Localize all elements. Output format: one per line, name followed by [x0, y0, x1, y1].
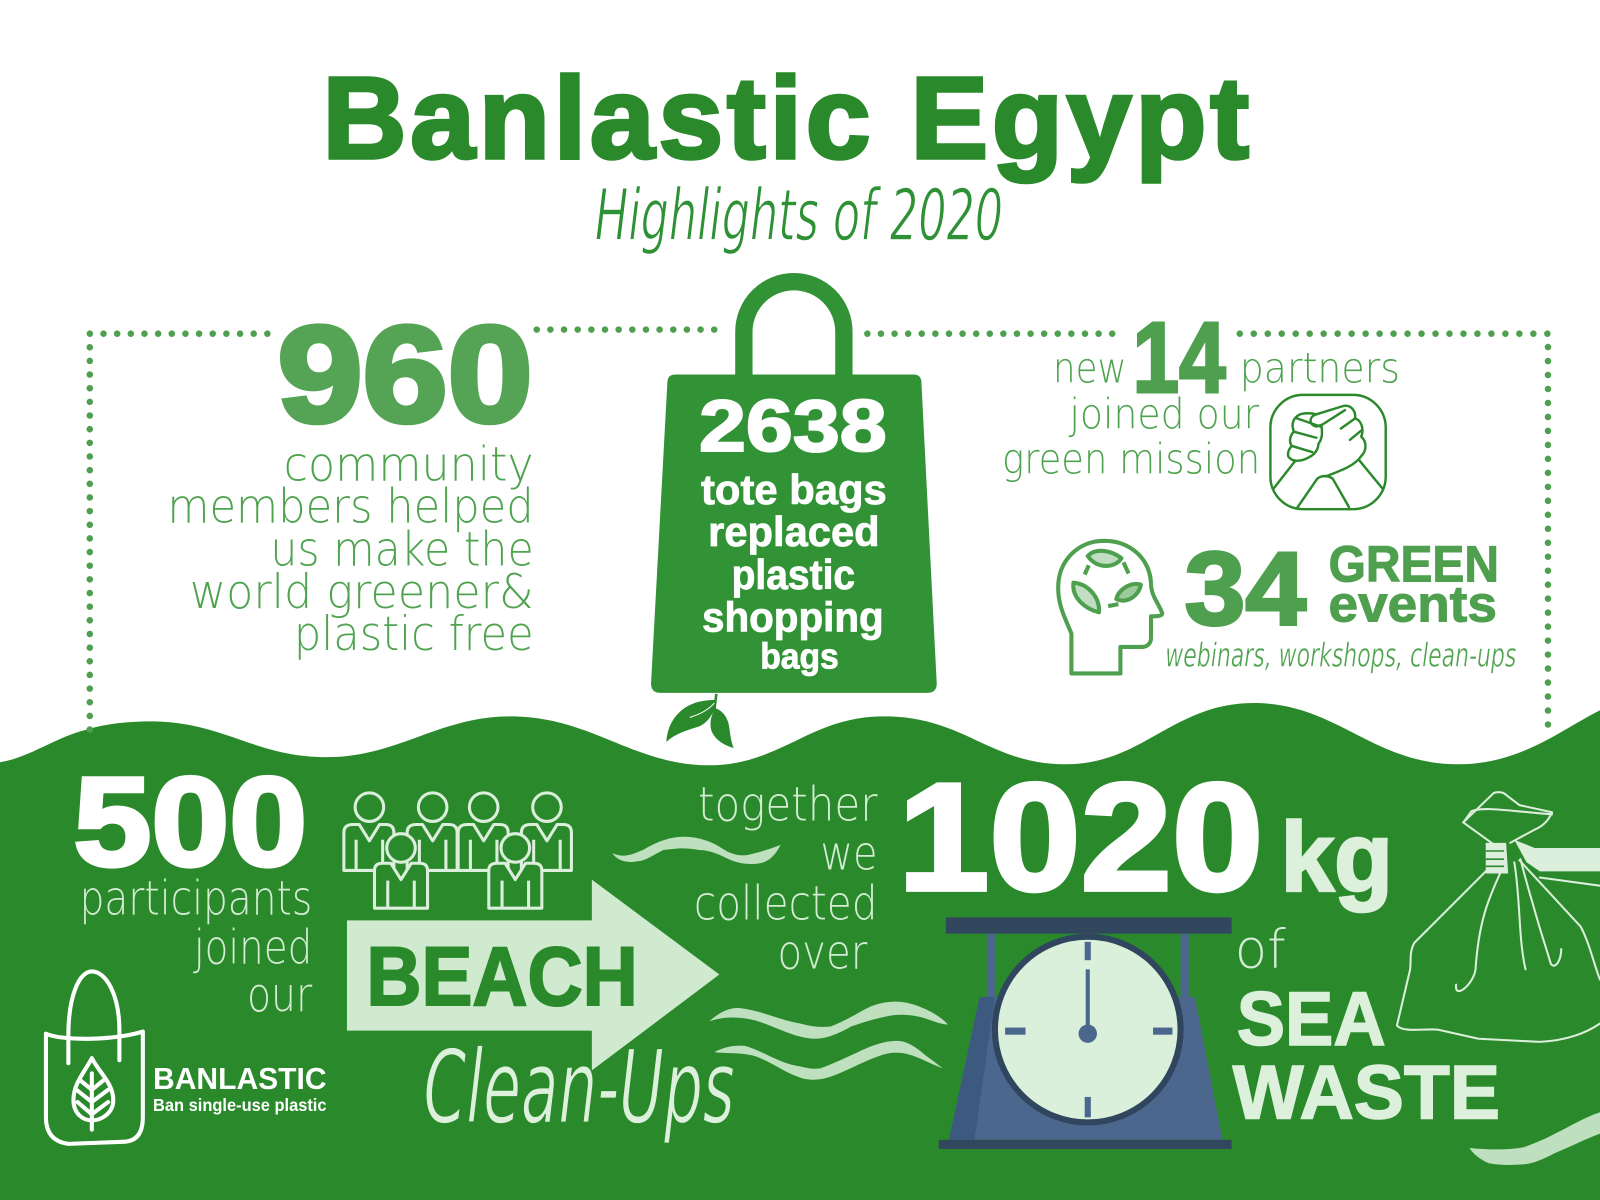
community members text: community [284, 438, 534, 493]
logo wordmark: BANLASTIC [153, 1062, 327, 1096]
icon: handshake [1270, 395, 1386, 509]
logo tagline: Ban single-use plastic [153, 1095, 327, 1115]
subtitle: Highlights of 2020 [595, 174, 1003, 257]
community members text: us make the [270, 522, 534, 577]
icon: trash bag held by hand [1397, 792, 1600, 1042]
stat: 1020 kg [898, 752, 1393, 923]
tote bag text: replaced [708, 508, 880, 555]
tote bag text [701, 466, 887, 676]
partners text: new [1053, 344, 1127, 393]
icon: leaves under bag [666, 694, 734, 748]
community members text [167, 438, 534, 662]
dotted frame [90, 330, 1548, 737]
tote bag text: plastic [732, 551, 855, 598]
stat: 34 green events: 34 [1185, 531, 1306, 647]
together we collected over: we [820, 826, 878, 881]
stat: 500 participants: 500 [73, 750, 307, 892]
stat: 34 green events [1165, 531, 1516, 674]
green wave background [0, 703, 1600, 1200]
together we collected over: collected [694, 876, 878, 931]
stat: 500 participants [73, 750, 313, 1023]
stat: 1020 kg: 1020 [898, 752, 1263, 923]
icon: weighing scale [939, 917, 1232, 1149]
sea waste heading: SEA [1237, 977, 1386, 1062]
of sea waste [1233, 918, 1500, 1135]
partners text: green mission [1002, 434, 1260, 483]
partners text: joined our [1068, 390, 1260, 439]
icon: head with leaves [1058, 541, 1162, 673]
community members text: members helped [167, 479, 534, 534]
community members text: plastic free [294, 607, 534, 662]
kg unit: kg [1281, 802, 1393, 912]
partners text: partners [1240, 344, 1400, 393]
green events heading: GREEN [1329, 536, 1499, 593]
sea waste heading: WASTE [1233, 1050, 1500, 1135]
title: Banlastic Egypt [322, 53, 1249, 183]
stat: 14 partners [1002, 302, 1400, 483]
arrow: beach [347, 880, 719, 1070]
stat: 14 partners: 14 [1133, 302, 1226, 414]
logo: banlastic [46, 971, 327, 1144]
participants text [80, 871, 313, 1023]
participants text: our [247, 968, 313, 1023]
BEACH label: BEACH [366, 929, 638, 1023]
decorative waves [612, 837, 1600, 1165]
clean-ups script: Clean-Ups [423, 1028, 735, 1147]
participants text: joined [193, 920, 312, 975]
icon: group of people [344, 793, 571, 908]
partners text [1002, 344, 1400, 483]
tote bag text: tote bags [701, 466, 887, 513]
of sea waste: of [1235, 918, 1286, 980]
sea waste heading [1233, 977, 1500, 1135]
green events heading [1329, 536, 1499, 632]
2638 number: 2638 [699, 384, 887, 467]
tote bag text: shopping [702, 594, 884, 641]
tote bag text: bags [760, 636, 839, 676]
together we collected over: over [778, 925, 868, 980]
participants text: participants [80, 871, 312, 926]
green events heading: events [1329, 575, 1497, 632]
stat: 960 community members [167, 297, 534, 662]
tote bag panel [651, 282, 937, 693]
together we collected over: together [698, 777, 878, 832]
community members text: world greener& [190, 565, 534, 620]
together we collected over [694, 777, 878, 980]
stat: 960 community members: 960 [278, 297, 533, 450]
